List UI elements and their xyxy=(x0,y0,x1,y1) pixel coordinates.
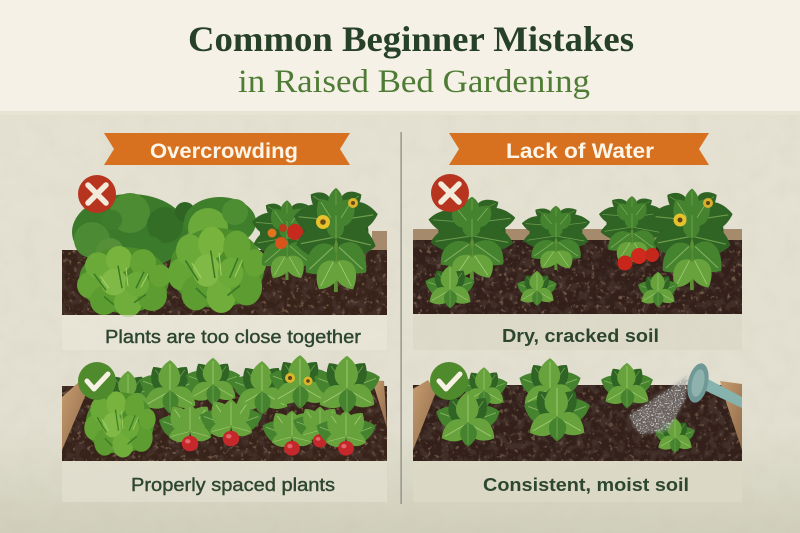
flowers: back row xyxy=(285,373,312,386)
plant: lettuce xyxy=(84,391,156,458)
caption: too close: Plants are too close together xyxy=(105,327,361,347)
panel: overcrowding xyxy=(62,133,387,502)
icon: red cross badge xyxy=(78,175,116,213)
fruit: tomatoes xyxy=(268,224,303,249)
plants: radishes xyxy=(155,395,379,456)
fruit: tomatoes xyxy=(618,248,659,270)
caption: properly spaced: Properly spaced plants xyxy=(131,475,335,495)
icon: red cross badge xyxy=(431,174,469,212)
plant: lettuce front center xyxy=(168,227,266,313)
title xyxy=(188,19,634,100)
plant: tall flowering xyxy=(650,186,734,293)
plant: dark lettuce xyxy=(72,193,195,270)
banner: lack of water: Lack of Water xyxy=(506,140,654,163)
plant: tomato xyxy=(598,195,666,264)
plants: back row xyxy=(99,355,384,417)
caption: properly spaced xyxy=(62,461,387,502)
garden bed: overcrowded plants xyxy=(62,186,387,317)
plant: lettuce front left xyxy=(77,246,171,317)
seedlings xyxy=(422,265,680,309)
banner: overcrowding: Overcrowding xyxy=(150,140,298,163)
caption: moist soil xyxy=(413,461,742,502)
caption: dry soil: Dry, cracked soil xyxy=(502,326,659,346)
flowers: yellow blossoms xyxy=(674,198,713,226)
icon: watering can xyxy=(684,361,742,408)
garden bed: dry soil xyxy=(413,186,742,314)
icon: green check badge xyxy=(430,362,468,400)
plant: tall flowering plant xyxy=(293,186,379,296)
wood frame xyxy=(413,380,742,450)
center divider xyxy=(400,132,402,504)
heading: main title: Common Beginner Mistakes xyxy=(188,19,634,59)
plants: back row xyxy=(457,358,656,413)
caption: moist soil: Consistent, moist soil xyxy=(483,475,689,495)
plant: middle xyxy=(521,204,591,272)
plant: tomato plant xyxy=(251,199,323,283)
heading: subtitle: in Raised Bed Gardening xyxy=(238,64,590,100)
plant: light lettuce back xyxy=(184,197,256,248)
garden bed: moist soil xyxy=(413,358,742,461)
flowers: yellow blossoms xyxy=(316,198,358,229)
wood frame xyxy=(62,378,387,450)
caption: too close xyxy=(62,315,387,350)
caption: dry soil xyxy=(413,314,742,350)
panel: lack of water xyxy=(413,133,742,502)
plants: front row xyxy=(432,384,697,454)
garden bed: proper spacing xyxy=(62,355,387,461)
plant: large left xyxy=(427,195,517,283)
banner: lack of water xyxy=(449,133,709,165)
water spray xyxy=(628,376,688,434)
icon: green check badge xyxy=(78,362,116,400)
banner: overcrowding xyxy=(104,133,350,165)
